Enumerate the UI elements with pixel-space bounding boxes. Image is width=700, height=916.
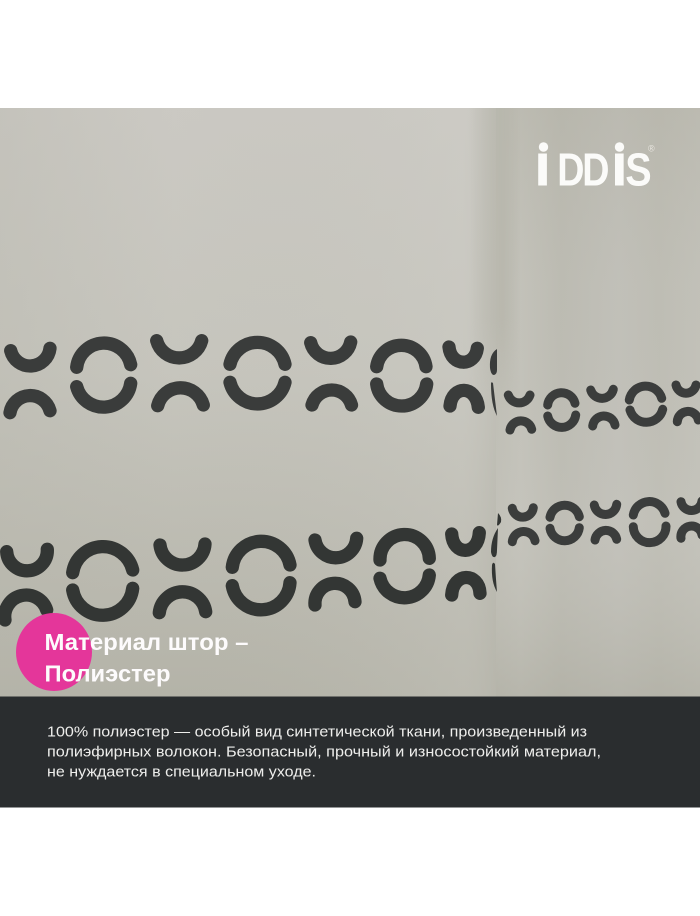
curtain pattern: left panel lower row bbox=[5, 513, 501, 620]
fold slivers bbox=[490, 349, 497, 416]
description panel bbox=[0, 696, 700, 808]
logo: IDDIS: D bbox=[582, 144, 609, 195]
logo: IDDIS: I bbox=[534, 145, 551, 196]
logo: IDDIS: I bbox=[611, 145, 628, 196]
description text bbox=[47, 724, 601, 781]
curtain pattern: right panel lower row bbox=[512, 501, 700, 543]
photo background: curtain fabric bbox=[0, 108, 700, 697]
fold slivers bbox=[491, 513, 501, 592]
logo: IDDIS bbox=[534, 142, 655, 196]
accent: pink circle bbox=[16, 613, 92, 691]
heading: material: Материал штор – bbox=[44, 629, 249, 655]
description text: не нуждается в специальном уходе. bbox=[47, 764, 316, 781]
description text: 100% полиэстер — особый вид синтетической ткани, произведенный из bbox=[47, 724, 587, 741]
curtain pattern: left panel upper row bbox=[10, 341, 497, 416]
description text: полиэфирных волокон. Безопасный, прочный и износостойкий материал, bbox=[47, 744, 601, 761]
logo: IDDIS: ® bbox=[648, 144, 655, 154]
logo: IDDIS: S bbox=[625, 145, 652, 196]
heading: material: Полиэстер bbox=[44, 660, 170, 686]
logo: IDDIS: D bbox=[557, 144, 584, 195]
curtain pattern: right panel upper row bbox=[508, 385, 698, 430]
heading: material bbox=[44, 629, 249, 686]
